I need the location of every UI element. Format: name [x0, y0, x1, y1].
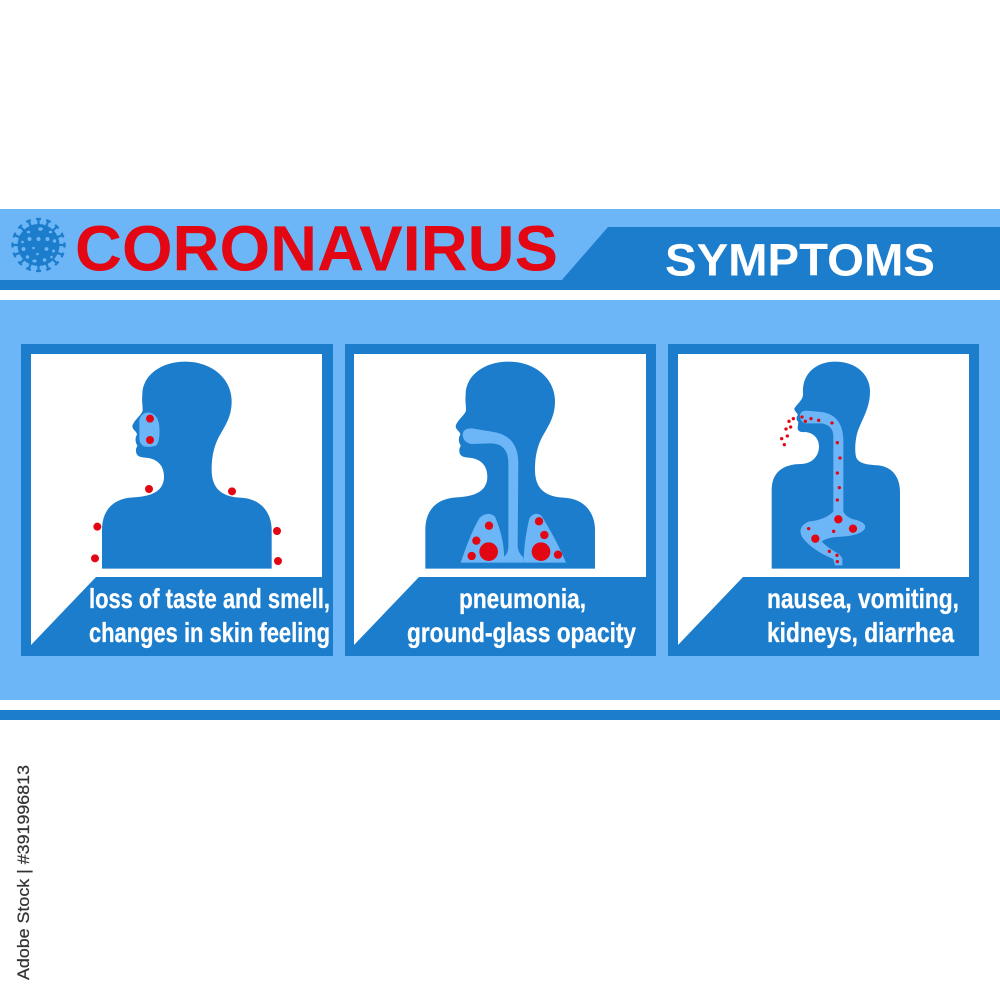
caption: nausea, vomiting, — [767, 583, 959, 614]
caption — [89, 583, 330, 648]
caption: kidneys, diarrhea — [767, 617, 954, 648]
stock image credit: Adobe Stock | #391996813 — [14, 765, 33, 980]
caption: ground-glass opacity — [407, 617, 636, 648]
header banner — [0, 209, 1000, 290]
icon: head with airway and lungs — [425, 362, 595, 569]
icon: head with digestive tract — [772, 362, 900, 569]
panel: taste and smell — [21, 344, 333, 656]
droplets and infection points — [780, 415, 857, 563]
title: CORONAVIRUS — [75, 212, 558, 284]
caption — [407, 583, 636, 648]
main panel background — [0, 300, 1000, 720]
icon: coronavirus — [12, 219, 64, 271]
subtitle: SYMPTOMS — [665, 234, 935, 286]
icon: head with sinus and lymph points — [91, 362, 282, 569]
caption: pneumonia, — [459, 583, 586, 614]
caption: loss of taste and smell, — [89, 583, 330, 614]
panel: digestive tract — [668, 344, 979, 656]
panel: lungs — [345, 344, 656, 656]
caption: changes in skin feeling — [89, 617, 330, 648]
caption — [767, 583, 959, 648]
